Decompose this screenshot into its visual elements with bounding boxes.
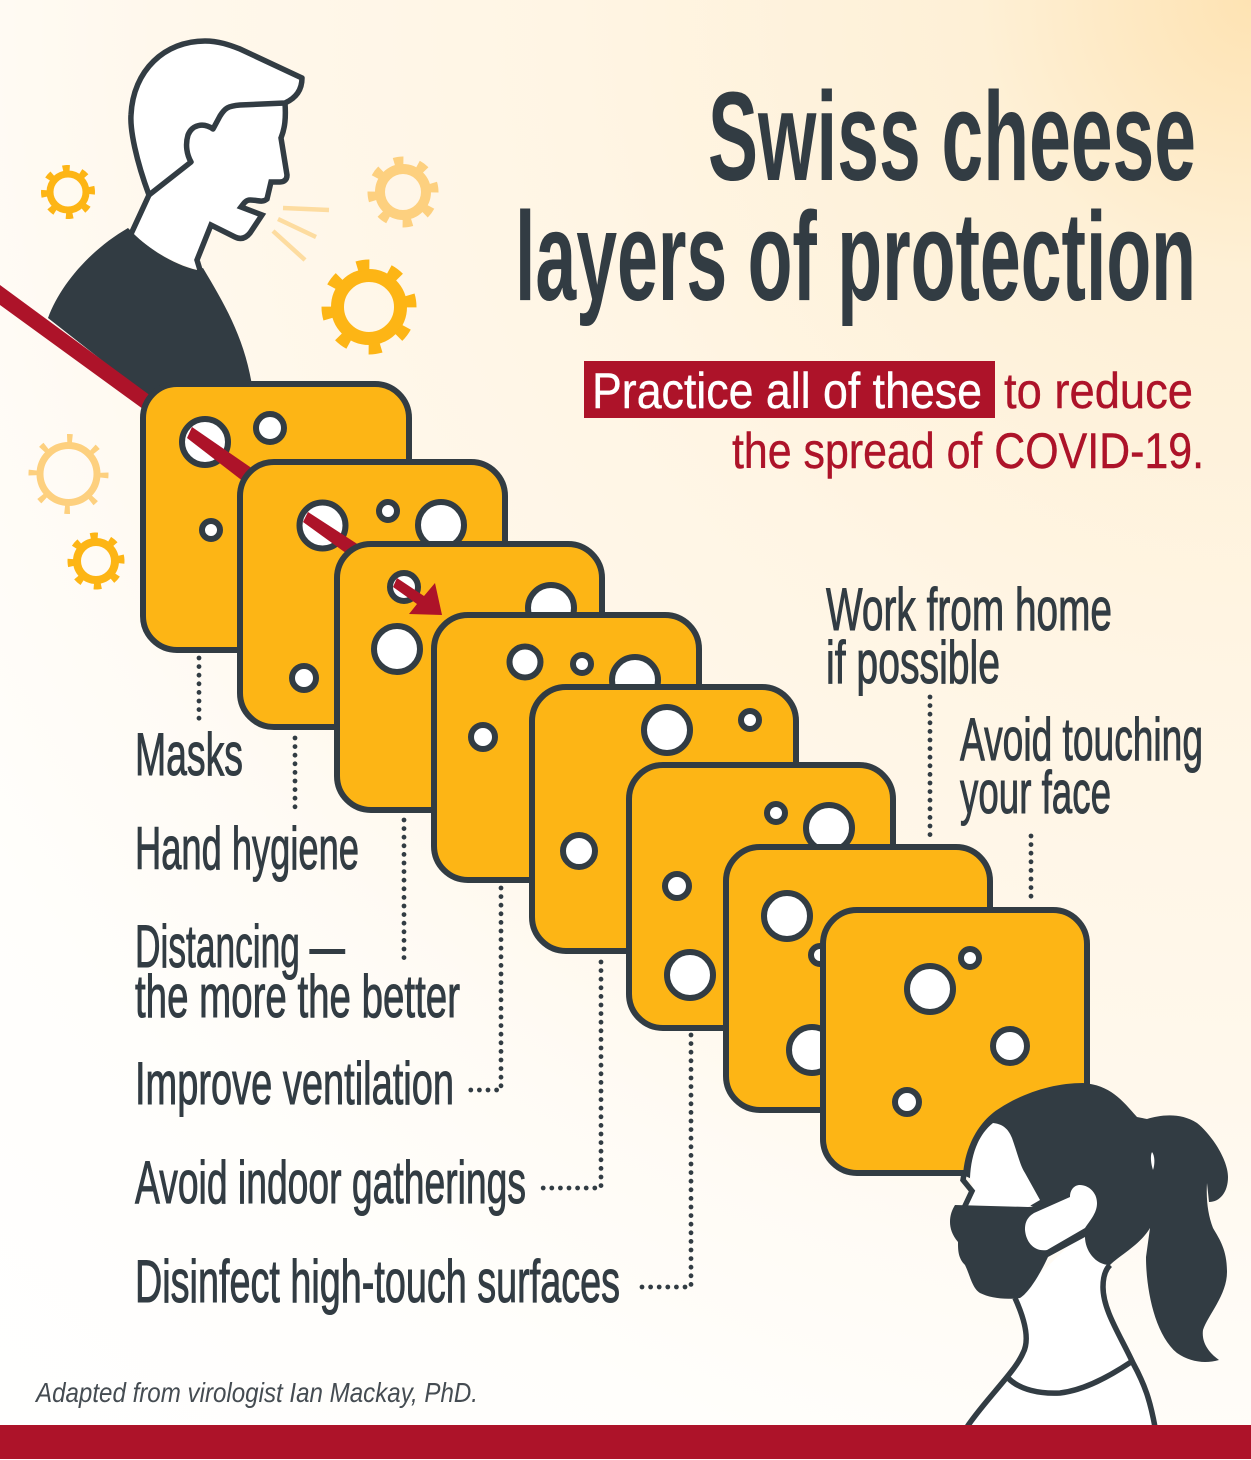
label: masks (135, 658, 243, 788)
label: avoid indoor gatherings: Avoid indoor gatherings (135, 1149, 526, 1216)
shirt (48, 228, 253, 398)
face and neck outline (131, 103, 287, 270)
nose outline (963, 1174, 972, 1208)
panel: card 1 masks (143, 384, 409, 650)
neck and shoulders outline (967, 1265, 1155, 1427)
icon: large virus particle (322, 260, 416, 354)
label: work from home (826, 576, 1112, 838)
label: disinfect surfaces: Disinfect high-touch surfaces (135, 1248, 620, 1315)
panel: card 4 ventilation (434, 615, 699, 880)
label: avoid touching your face: your face (960, 759, 1111, 826)
virus path arrow entering (0, 285, 155, 409)
icon: virus particle left (70, 535, 122, 587)
label: improve ventilation (135, 888, 501, 1117)
title (515, 66, 1196, 327)
hair and face fill (131, 41, 302, 270)
label: distancing: Distancing — (135, 913, 345, 980)
mask strap over ear (1025, 1185, 1097, 1250)
icon: woman wearing mask (950, 1083, 1228, 1427)
panel: card 2 hand hygiene (240, 462, 505, 727)
panel: card 5 indoor gatherings (532, 687, 796, 951)
face (968, 1123, 1040, 1207)
collar (1008, 1362, 1131, 1393)
icon: pale virus particle left (32, 438, 105, 510)
label: distancing (135, 820, 460, 1030)
icon: virus particle top left (43, 167, 93, 217)
mask (950, 1205, 1085, 1299)
label: work from home: if possible (826, 629, 1000, 696)
hair outline and ear (131, 41, 302, 195)
label: disinfect surfaces (135, 1035, 691, 1315)
ponytail gap (1151, 1152, 1154, 1170)
hair and ponytail (963, 1083, 1228, 1362)
label: hand hygiene: Hand hygiene (135, 815, 359, 882)
panel: card 7 work from home (726, 847, 990, 1110)
label: distancing: the more the better (135, 963, 460, 1030)
panel: card 8 avoid touching face (823, 910, 1087, 1173)
icon: virus particle pale top (368, 157, 438, 227)
icon: coughing man (48, 41, 329, 398)
subtitle: to reduce (1004, 363, 1193, 419)
subtitle (584, 361, 1204, 479)
panel: card 3 distancing (337, 544, 602, 810)
neck and shoulders fill (967, 1230, 1155, 1427)
subtitle highlight: Practice all of these (592, 363, 982, 419)
cough lines (273, 208, 329, 260)
label: improve ventilation: Improve ventilation (135, 1050, 454, 1117)
source note: Adapted from virologist Ian Mackay, PhD. (34, 1377, 478, 1408)
panel: card 6 surfaces (629, 765, 893, 1028)
label: masks: Masks (135, 721, 243, 788)
label: avoid touching your face (960, 706, 1203, 900)
label: avoid indoor gatherings (135, 962, 601, 1216)
bottom bar (0, 1425, 1251, 1459)
